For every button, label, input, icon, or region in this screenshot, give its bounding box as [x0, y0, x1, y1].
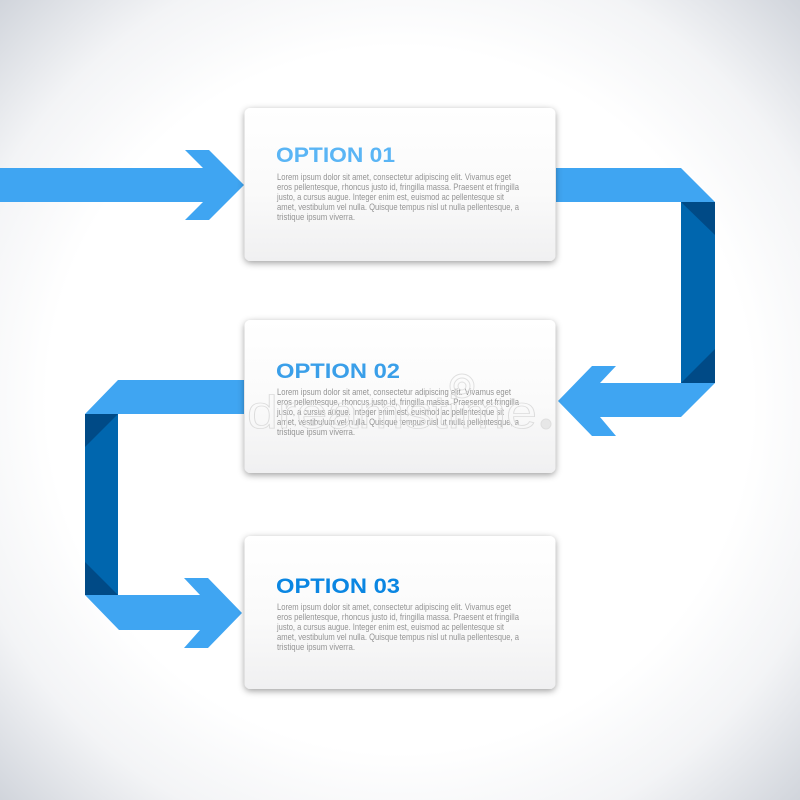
- heading: OPTION 01: [276, 143, 395, 167]
- text block: eros pellentesque, rhoncus justo id, fringilla massa. Praesent et fringilla: [277, 397, 520, 407]
- text block: justo, a cursus augue. Integer enim est, euismod ac pellentesque sit: [276, 622, 504, 632]
- text block: Lorem ipsum dolor sit amet, consectetur adipiscing elit. Vivamus eget: [277, 172, 511, 182]
- watermark wordmark: dreamstime: [247, 386, 537, 438]
- text block: [276, 602, 520, 652]
- text block: justo, a cursus augue. Integer enim est, euismod ac pellentesque sit: [276, 192, 504, 202]
- heading: OPTION 03: [276, 574, 400, 598]
- ribbon: top fold shadow: [681, 202, 715, 235]
- panel: option 01: [244, 108, 556, 261]
- text block: eros pellentesque, rhoncus justo id, fringilla massa. Praesent et fringilla: [277, 612, 520, 622]
- text block: Lorem ipsum dolor sit amet, consectetur adipiscing elit. Vivamus eget: [277, 602, 511, 612]
- panel: option 03: [244, 536, 556, 689]
- ribbon: top band: [556, 168, 715, 202]
- watermark rings: [450, 374, 551, 429]
- ribbon: vertical fold: [681, 202, 715, 383]
- ribbon: bottom fold shadow: [681, 349, 715, 383]
- ribbon: top fold shadow: [85, 414, 118, 447]
- text block: amet, vestibulum vel nulla. Quisque tempus nisl ut nulla pellentesque, a: [277, 417, 520, 427]
- text block: eros pellentesque, rhoncus justo id, fringilla massa. Praesent et fringilla: [277, 182, 520, 192]
- text block: tristique ipsum viverra.: [277, 427, 355, 437]
- arrow: option 01 to option 02: [556, 168, 715, 436]
- arrow: option 02 to option 03: [85, 380, 244, 648]
- card: [244, 320, 556, 473]
- card: [244, 108, 556, 261]
- arrow head: pointing right: [85, 578, 242, 648]
- card: [244, 536, 556, 689]
- text block: [276, 172, 520, 222]
- text block: amet, vestibulum vel nulla. Quisque tempus nisl ut nulla pellentesque, a: [277, 632, 520, 642]
- ribbon: vertical fold: [85, 414, 118, 595]
- arrow head: pointing left: [558, 366, 715, 436]
- text block: justo, a cursus augue. Integer enim est, euismod ac pellentesque sit: [276, 407, 504, 417]
- arrow: entry into option 01: [0, 150, 244, 220]
- text block: amet, vestibulum vel nulla. Quisque tempus nisl ut nulla pellentesque, a: [277, 202, 520, 212]
- text block: [276, 387, 520, 437]
- watermark: [247, 374, 551, 438]
- heading: OPTION 02: [276, 359, 400, 383]
- ribbon: bottom fold shadow: [85, 562, 118, 595]
- ribbon: top band: [85, 380, 244, 414]
- text block: tristique ipsum viverra.: [277, 212, 355, 222]
- panel: option 02: [244, 320, 556, 473]
- text block: Lorem ipsum dolor sit amet, consectetur adipiscing elit. Vivamus eget: [277, 387, 511, 397]
- text block: tristique ipsum viverra.: [277, 642, 355, 652]
